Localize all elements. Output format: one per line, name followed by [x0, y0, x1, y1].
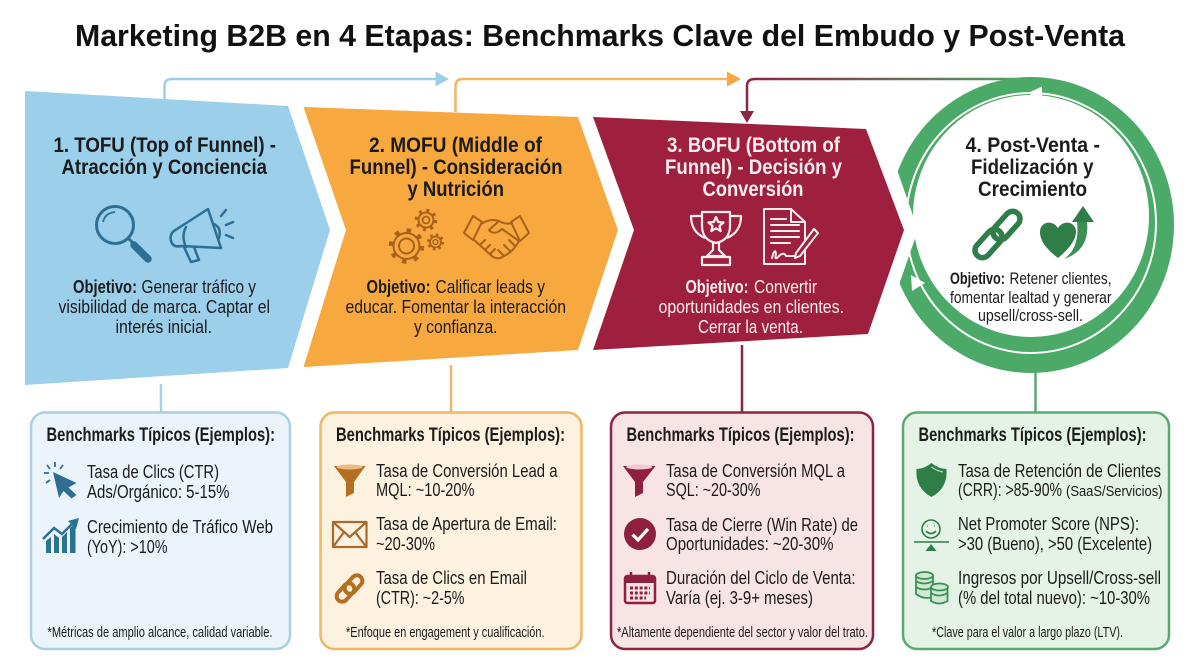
icon: trophy	[691, 212, 741, 265]
objective text: stage 4: upsell/cross-sell.	[978, 307, 1083, 325]
heading: benchmarks TOFU: Benchmarks Típicos (Ejemplos):	[46, 425, 275, 446]
metric: CTR	[87, 461, 230, 502]
metric: retention: (SaaS/Servicios)	[1066, 484, 1162, 500]
heading: stage 2: Funnel) - Consideración	[350, 155, 562, 179]
metric: win rate	[666, 514, 858, 554]
metric: MQL to SQL	[666, 460, 846, 500]
icon: megaphone	[171, 209, 233, 262]
panel: stage 3 BOFU	[593, 117, 904, 350]
arrow: post-sale back to BOFU	[740, 79, 1040, 123]
icon: shield	[916, 463, 947, 497]
panel: benchmarks MOFU	[320, 412, 582, 649]
objective text: stage 3: Cerrar la venta.	[698, 317, 803, 337]
arrow: TOFU to MOFU	[164, 72, 449, 100]
heading: stage 3: Conversión	[702, 177, 804, 201]
connector: MOFU to benchmarks	[450, 365, 452, 413]
icon: click cursor	[44, 462, 76, 498]
metric: sales cycle: Duración del Ciclo de Venta:	[666, 567, 856, 588]
metric: retention	[958, 460, 1162, 500]
heading: stage 3: 3. BOFU (Bottom of	[667, 133, 841, 157]
objective text: stage 1: Generar tráfico y	[142, 277, 256, 297]
heading: stage 4: Fidelización y	[971, 155, 1094, 179]
heading: stage 4	[966, 133, 1100, 201]
footnote: *Enfoque en engagement y cualificación.	[346, 625, 544, 641]
metric: sales cycle: Varía (ej. 3-9+ meses)	[666, 587, 813, 608]
footnote: *Altamente dependiente del sector y valor del trato.	[617, 625, 868, 641]
metric: email open rate	[376, 513, 557, 554]
heading: stage 1: Atracción y Conciencia	[62, 155, 268, 179]
icon: link	[334, 573, 365, 604]
icon: handshake	[464, 216, 529, 258]
icon: calendar	[625, 572, 655, 603]
metric: retention: (CRR): >85-90%	[958, 479, 1062, 500]
objective text: stage 1	[58, 277, 270, 337]
metric: NPS: Net Promoter Score (NPS):	[958, 513, 1139, 534]
objective text: stage 3: oportunidades en clientes.	[658, 297, 844, 317]
icon: envelope	[333, 522, 366, 547]
icon: coin stacks	[916, 572, 948, 604]
heading: benchmarks MOFU: Benchmarks Típicos (Ejemplos):	[336, 425, 565, 446]
arrow: MOFU to BOFU	[456, 72, 741, 112]
ring	[860, 77, 1174, 373]
icon: funnel	[623, 464, 656, 497]
objective text: stage 4	[950, 270, 1112, 325]
connector: BOFU to benchmarks	[741, 345, 743, 413]
objective text: stage 2: educar. Fomentar la interacción	[346, 297, 566, 317]
panel: benchmarks post-sale	[903, 412, 1169, 649]
footnote: *Métricas de amplio alcance, calidad variable.	[48, 625, 272, 641]
metric: CTR: Ads/Orgánico: 5-15%	[87, 481, 230, 502]
heading: stage 4: 4. Post-Venta -	[966, 133, 1100, 157]
metric: lead to MQL	[376, 460, 558, 500]
metric: email click rate: (CTR): ~2-5%	[376, 587, 464, 608]
icon: magnifying glass	[96, 206, 148, 259]
metric: email click rate: Tasa de Clics en Email	[376, 567, 527, 588]
icon: signed document	[764, 209, 818, 264]
panel: stage 2 MOFU	[304, 107, 618, 367]
connector: TOFU to benchmarks	[160, 384, 162, 413]
icon: funnel	[334, 464, 366, 497]
metric: sales cycle	[666, 567, 856, 608]
metric: upsell revenue	[958, 567, 1161, 608]
metric: web traffic growth: (YoY): >10%	[87, 536, 168, 557]
objective text: stage 3: Convertir	[754, 277, 817, 297]
metric: NPS	[958, 513, 1152, 554]
metric: upsell revenue: (% del total nuevo): ~10-30%	[958, 587, 1150, 608]
icon: gears	[391, 210, 442, 262]
heading: stage 3: Funnel) - Decisión y	[665, 155, 842, 179]
heading: stage 3	[665, 133, 842, 201]
icon: growth chart	[43, 518, 79, 553]
heading: stage 2: y Nutrición	[408, 177, 504, 201]
icon: chain link	[972, 208, 1023, 261]
panel: benchmarks TOFU	[31, 412, 290, 649]
objective text: stage 4: Objetivo:	[950, 270, 1005, 288]
heading: stage 1	[54, 133, 276, 179]
metric: CTR: Tasa de Clics (CTR)	[87, 461, 219, 482]
icon: check circle	[624, 518, 656, 550]
metric: lead to MQL: Tasa de Conversión Lead a	[376, 460, 558, 481]
panel: stage 1 TOFU	[25, 91, 330, 385]
heading: stage 1: 1. TOFU (Top of Funnel) -	[54, 133, 276, 157]
metric: email open rate: Tasa de Apertura de Email:	[376, 513, 557, 534]
metric: web traffic growth	[87, 516, 273, 557]
icon: NPS smile on balance	[914, 520, 949, 551]
objective text: stage 4: fomentar lealtad y generar	[950, 289, 1112, 307]
metric: NPS: >30 (Bueno), >50 (Excelente)	[958, 533, 1152, 554]
objective text: stage 2: y confianza.	[414, 317, 498, 337]
heading: stage 4: Crecimiento	[978, 177, 1087, 201]
metric: MQL to SQL: SQL: ~20-30%	[666, 479, 760, 500]
metric: email click rate	[376, 567, 527, 608]
objective text: stage 4: Retener clientes,	[1010, 270, 1112, 288]
metric: web traffic growth: Crecimiento de Tráfico Web	[87, 516, 273, 537]
objective text: stage 2	[346, 277, 566, 337]
metric: MQL to SQL: Tasa de Conversión MQL a	[666, 460, 846, 481]
heading: benchmarks BOFU: Benchmarks Típicos (Ejemplos):	[626, 425, 854, 446]
objective text: stage 2: Objetivo:	[366, 277, 430, 297]
panel: benchmarks BOFU	[611, 412, 873, 649]
objective text: stage 1: interés inicial.	[116, 317, 212, 337]
title: Marketing B2B en 4 Etapas: Benchmarks Clave del Embudo y Post-Venta	[75, 18, 1126, 53]
metric: email open rate: ~20-30%	[376, 533, 435, 554]
objective text: stage 3	[658, 277, 844, 337]
objective text: stage 3: Objetivo:	[686, 277, 748, 297]
metric: win rate: Tasa de Cierre (Win Rate) de	[666, 514, 858, 535]
footnote: *Clave para el valor a largo plazo (LTV).	[932, 625, 1123, 641]
connector: post-sale to benchmarks	[1034, 370, 1037, 413]
heading: stage 2: 2. MOFU (Middle of	[369, 133, 543, 157]
panel: stage 4 post-sale ring	[860, 77, 1174, 373]
objective text: stage 1: Objetivo:	[73, 277, 137, 297]
metric: upsell revenue: Ingresos por Upsell/Cross-sell	[958, 567, 1161, 588]
heading: stage 2	[350, 133, 562, 201]
icon: heart with growth arrow	[1040, 206, 1094, 259]
metric: win rate: Oportunidades: ~20-30%	[666, 533, 834, 554]
metric: lead to MQL: MQL: ~10-20%	[376, 479, 474, 500]
objective text: stage 1: visibilidad de marca. Captar el	[58, 297, 270, 317]
objective text: stage 2: Calificar leads y	[436, 277, 545, 297]
